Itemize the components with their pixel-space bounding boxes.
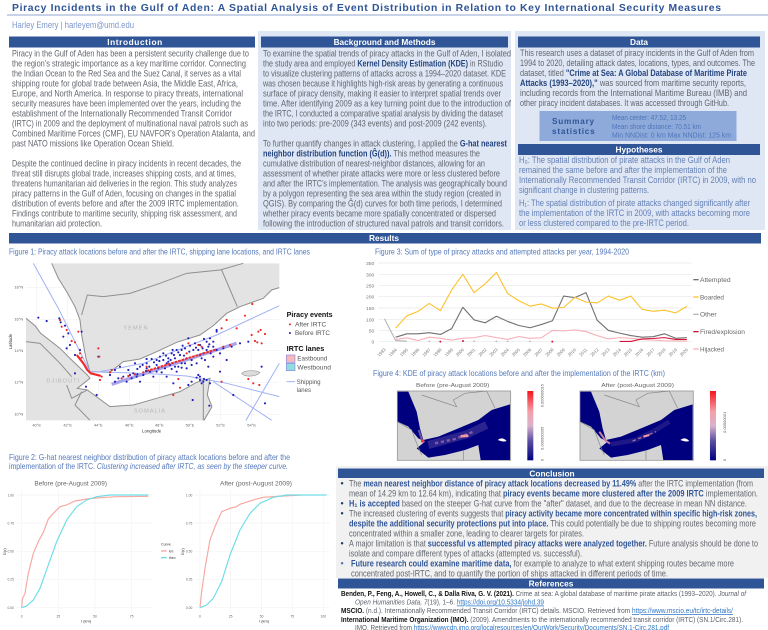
text: methods body: into two periods: pre-2009 (343 events) and post-2009 (242 events). <box>263 118 487 128</box>
text: introduction body: (IRTC) in 2009 and the deployment of multinational naval patrols such as <box>12 118 248 128</box>
chart: figure 2 g-hat curves: 75 <box>130 615 134 619</box>
heading: background and methods: Background and Methods <box>334 37 436 47</box>
chart legend: Attempted <box>700 277 731 284</box>
chart legend: Fired/explosion <box>700 329 745 336</box>
axis labels: 12°N <box>14 380 23 385</box>
axis labels: 0.75 <box>186 521 192 525</box>
text: introduction body: shipping route for global trade between Asia, the Middle East, Africa, <box>12 78 238 88</box>
heading: results <box>9 233 761 244</box>
text: introduction body: distribution of events before and after the 2009 IRTC implementation. <box>12 198 239 208</box>
text: methods body: to visualize clustering patterns of attacks across a 1994–2020 dataset. KDE <box>263 68 506 78</box>
panel: conclusion <box>336 466 768 578</box>
heading: hypotheses <box>518 144 760 155</box>
text: introduction body: threatens humanitarian aid deliveries in the region. This study analyzes <box>12 178 237 188</box>
text: conclusion bullets: • <box>340 498 344 508</box>
text: methods body: To examine the spatial trends of piracy attacks in the Gulf of Aden, I isolated <box>263 48 511 58</box>
KDE before: Before (pre-August 2009) <box>416 383 489 389</box>
x axis labels: 2004 <box>500 347 510 358</box>
chart: figure 3 line chart <box>366 261 745 358</box>
map legend <box>286 310 333 394</box>
text: hypotheses body: or less clustered compared to the pre-IRTC period. <box>519 217 689 228</box>
x axis labels: 2005 <box>511 347 521 358</box>
x axis labels: 2003 <box>488 347 499 358</box>
chart: figure 2 g-hat curves: 50 <box>260 615 264 619</box>
heading: conclusion <box>338 468 764 478</box>
curve legend <box>161 543 176 560</box>
y axis labels: 0 <box>372 340 375 346</box>
map legend: Before IRTC <box>295 330 330 337</box>
text: conclusion bullets: • <box>340 558 344 568</box>
heading: hypotheses: Hypotheses <box>615 144 663 154</box>
axis labels: 48°E <box>155 422 164 427</box>
borders and coastlines <box>26 263 279 420</box>
axis labels: 46°E <box>125 422 134 427</box>
text: methods body: the IRTC, I conducted a comparative spatial analysis by dividing the dataset <box>263 108 503 118</box>
text: introduction body: Combined Maritime Forces (CMF), EU NAVFOR’s Operation Atalanta, and <box>12 128 255 138</box>
text: hypotheses body: significant change in clustering patterns. <box>519 184 649 195</box>
text: methods body: and after the IRTC’s implementation. The analysis was geographically bound <box>263 178 507 188</box>
callout: summary statistics: Mean center: 47.52, 13.25 <box>612 113 686 122</box>
x axis labels: 1996 <box>410 347 421 358</box>
text: conclusion bullets: • <box>340 538 344 548</box>
x axis labels: 2020 <box>679 347 689 358</box>
text: introduction body: the Indian Ocean to the Red Sea and the Suez Canal, it serves as a vital <box>12 68 241 78</box>
country labels: YEMEN <box>123 325 149 331</box>
chart: figure 2 g-hat curves: 0 <box>199 615 201 619</box>
caption: figure 3: Figure 3: Sum of type of piracy attacks and attempted attacks per year, 1994-2020 <box>375 246 629 256</box>
KDE after <box>580 383 727 461</box>
x axis labels: 1999 <box>444 347 454 358</box>
country labels: DJIBOUTI <box>46 379 80 385</box>
text: methods body: whether piracy events became more spatially concentrated or dispersed <box>262 208 496 218</box>
x axis labels: 1997 <box>421 347 432 358</box>
chart: figure 2 g-hat curves: G(r) <box>180 547 185 555</box>
text: data body <box>520 47 755 108</box>
axis labels: 0.25 <box>186 578 192 582</box>
chart: figure 1 map <box>8 263 333 433</box>
text: references: MSCIO. (n.d.). Internationally Recommended Transit Corridor (IRTC) details. MSCIO. Retrieved from https://www.mscio.eu/tc/irtc-details/ <box>341 606 734 615</box>
text: introduction body: threat still disrupts global trade, increases shipping costs, and at times, <box>12 168 236 178</box>
axis labels: 40°E <box>32 422 41 427</box>
map legend: lanes <box>297 387 311 394</box>
country labels <box>46 325 166 415</box>
text: references: Open Humanities Data, 7(19), 1–6. https://doi.org/10.5334/johd.39 <box>355 598 544 606</box>
after IRTC points <box>77 356 100 376</box>
text: methods body <box>262 48 511 228</box>
heading: data: Data <box>630 37 648 47</box>
before panel: Before (pre-August 2009) <box>34 481 107 488</box>
heading: introduction: Introduction <box>107 37 163 47</box>
chart legend: Boarded <box>700 294 724 301</box>
axis labels: 18°N <box>14 285 23 290</box>
text: methods body: neighbor distribution function (Ĝ(d)). This method measures the <box>263 148 480 158</box>
before IRTC points <box>38 318 265 406</box>
x axis labels: 2013 <box>600 347 611 358</box>
KDE after: 0.00000001 <box>722 411 727 433</box>
text: introduction body: Europe, and North America. In response to piracy threats, international <box>12 88 243 98</box>
axis labels: 52°E <box>216 422 225 427</box>
axis labels: 16°N <box>14 317 23 322</box>
curve legend: km <box>169 549 174 553</box>
chart: figure 2 g-hat curves: r (km) <box>259 618 270 623</box>
chart legend: Hijacked <box>700 346 724 353</box>
x axis labels: 2014 <box>612 347 622 358</box>
axis labels: Latitude <box>8 333 13 349</box>
callout: summary statistics <box>540 111 736 141</box>
text: conclusion bullets: concentrated within a smaller zone, leading to clearer targets for pirates. <box>349 528 584 538</box>
text: methods body: was chosen because it highlights high-risk areas by generating a continuous <box>262 78 503 88</box>
axis labels: 0.50 <box>8 550 14 554</box>
heading: data <box>518 36 760 48</box>
text: conclusion bullets: isolate and compare different types of attacks (attempted vs. successful). <box>349 548 582 558</box>
text: introduction body: Findings contribute to maritime security, shipping risk assessment, and <box>12 208 237 218</box>
text: methods body: To further quantify changes in attack clustering, I applied the G-hat nearest <box>263 138 507 148</box>
shipping lanes <box>33 263 279 420</box>
y axis labels: 100 <box>366 317 375 323</box>
KDE before: 0.000000015 <box>539 383 544 407</box>
chart: figure 2 g-hat curves: 0 <box>21 615 23 619</box>
x axis labels: 1998 <box>432 347 443 358</box>
map legend: Eastbound <box>297 355 328 362</box>
chart: figure 2 g-hat curves: r (km) <box>81 618 92 623</box>
axis labels: 0.25 <box>8 578 14 582</box>
country labels: SOMALIA <box>134 409 166 415</box>
text: methods body: cumulative distribution of nearest-neighbor distances, allowing for an <box>263 158 485 168</box>
x axis labels: 2012 <box>589 347 600 358</box>
curve legend: Curve <box>161 543 171 547</box>
text: introduction body: establishment of the Internationally Recommended Transit Corridor <box>12 108 232 118</box>
axis labels: 10°N <box>14 412 23 417</box>
series: other <box>384 319 407 341</box>
x axis labels: 2010 <box>567 347 577 358</box>
after panel: After (post-August 2009) <box>220 481 292 488</box>
KDE before <box>397 383 544 461</box>
y axis labels: 200 <box>366 295 375 301</box>
series: boarded <box>396 272 687 328</box>
x axis labels: 2019 <box>668 347 678 358</box>
text: conclusion bullets: • <box>340 478 344 488</box>
axis labels: 0.00 <box>8 606 14 610</box>
text: introduction body: security measures have been implemented over the years, including the <box>12 98 241 108</box>
x axis labels: 1994 <box>388 347 398 358</box>
axis labels: 1.00 <box>186 493 192 497</box>
map legend: After IRTC <box>295 321 327 328</box>
axis labels: 54°E <box>247 422 256 427</box>
heading: references: References <box>529 578 574 588</box>
text: conclusion bullets: mean of 14.29 km to 12.64 km), indicating that piracy events became more clustered after the 2009 IRTC implementation. <box>349 488 758 498</box>
axis labels: 50°E <box>186 422 195 427</box>
axis labels <box>8 285 256 433</box>
series: hijacked <box>396 330 687 341</box>
x axis labels: 2009 <box>556 347 566 358</box>
x axis labels: 2006 <box>522 347 533 358</box>
caption: figure 1: Figure 1: Piracy attack locations before and after the IRTC, shipping lane locations, and IRTC lanes <box>9 246 310 256</box>
x axis labels: 1995 <box>399 347 409 358</box>
text: conclusion bullets: concentrated post-IRTC, and to quantify the portion of ships attacked in different periods of time. <box>351 568 668 578</box>
text: introduction body: the region’s strategic importance as a key maritime corridor. Connecting <box>12 58 246 68</box>
callout: summary statistics: Mean shore distance: 70.51 km <box>612 122 701 131</box>
map legend: Westbound <box>297 364 331 371</box>
chart: figure 2 g-hat curves: 75 <box>290 615 294 619</box>
chart legend: Other <box>700 312 717 319</box>
y axis labels: 250 <box>366 284 375 290</box>
heading: conclusion: Conclusion <box>529 468 575 478</box>
text: introduction body <box>12 48 255 228</box>
text: references: Benden, P., Feng, A., Howell, C., & Dalla Riva, G. V. (2021). Crime at sea: A global database of maritime pirate attacks (1993–2020). Journal of <box>341 589 747 598</box>
x axis labels: 2001 <box>466 347 477 358</box>
chart: figure 2 g-hat curves: 25 <box>56 615 60 619</box>
text: introduction body: piracy patterns in the Gulf of Aden, focusing on changes in the spatial <box>12 188 236 198</box>
axis labels: 1.00 <box>8 493 14 497</box>
text: methods body: following the introduction of structured naval patrols and transit corridors. <box>263 218 504 228</box>
axis labels: 0.50 <box>186 550 192 554</box>
chart: figure 2 g-hat curves: 50 <box>93 615 97 619</box>
map legend: Shipping <box>297 379 321 386</box>
y axis labels: 150 <box>366 306 375 312</box>
y axis labels: 50 <box>369 328 375 334</box>
KDE after: 0 <box>722 458 727 461</box>
text: conclusion bullets <box>340 478 758 578</box>
axis labels: 0.75 <box>8 521 14 525</box>
chart: figure 2 g-hat curves: G(r) <box>2 547 7 555</box>
text: introduction body: past NATO missions like Operation Ocean Shield. <box>12 138 174 148</box>
text: introduction body: Piracy in the Gulf of Aden has been a persistent security challenge due to <box>12 48 249 58</box>
x axis labels: 2016 <box>634 347 645 358</box>
heading: references <box>338 578 764 588</box>
chart legend <box>693 277 745 353</box>
author line: Harley Emery | harleyem@umd.edu <box>12 20 134 30</box>
heading: introduction <box>9 36 255 48</box>
axis labels: 0.00 <box>186 606 192 610</box>
KDE before: 0.000000005 <box>539 426 544 450</box>
heading: results: Results <box>369 233 399 243</box>
text: methods body: by a polygon representing the sea area within the study region (created in <box>263 188 501 198</box>
axis labels: 44°E <box>94 422 103 427</box>
y axis labels: 300 <box>366 272 375 278</box>
chart: figure 2 g-hat curves <box>2 481 330 623</box>
x axis labels: 2011 <box>578 347 589 357</box>
KDE after: After (post-August 2009) <box>601 383 674 389</box>
panel: background and methods <box>258 31 511 230</box>
caption: figure 2 <box>9 452 290 471</box>
title: Piracy Incidents in the Gulf of Aden: A Spatial Analysis of Event Distribution in Relation to Key International Security Measures <box>12 3 721 14</box>
x axis labels: 2018 <box>656 347 667 358</box>
x axis labels: 2000 <box>455 347 465 358</box>
x axis labels: 2002 <box>477 347 488 358</box>
x axis labels: 2008 <box>544 347 555 358</box>
panel: data and hypotheses <box>515 31 765 230</box>
x axis labels: 2017 <box>645 347 656 358</box>
chart: figure 4 KDE maps <box>397 383 727 461</box>
caption: figure 4: Figure 4: KDE of piracy attack locations before and after the implementation of the IRTC (km) <box>373 368 665 378</box>
text: introduction body: Despite the continued decline in piracy incidents in recent decades, the <box>12 158 241 168</box>
IRTC lanes band <box>112 343 237 384</box>
x axis labels <box>376 347 689 358</box>
text: methods body: surface of piracy density, making it easier to interpret spatial trends over <box>263 88 501 98</box>
axis labels: 42°E <box>63 422 72 427</box>
series: fired/explosion <box>620 338 687 341</box>
axis labels <box>8 493 192 610</box>
land: arabian peninsula <box>52 263 279 372</box>
text: introduction body: humanitarian aid protection. <box>12 218 102 228</box>
x axis labels: 2007 <box>533 347 544 358</box>
chart: figure 2 g-hat curves: 100 <box>321 615 326 619</box>
text: methods body: time. After identifying 2009 as a key turning point due to the introduction of <box>263 98 511 108</box>
y axis labels: 350 <box>366 261 375 267</box>
text: methods body: assessment of whether pirate attacks were more or less clustered before <box>263 168 500 178</box>
axis labels: Longitude <box>142 428 162 433</box>
map legend: IRTC lanes <box>287 344 324 353</box>
before panel <box>22 481 148 608</box>
panel: introduction <box>9 36 255 228</box>
x axis labels: 1993 <box>376 347 387 358</box>
map legend: Piracy events <box>287 310 333 319</box>
chart: figure 2 g-hat curves: 25 <box>229 615 233 619</box>
text: references <box>341 589 747 630</box>
text: methods body: QGIS). By comparing the Ĝ(d) curves for both time periods, I determined <box>263 198 502 208</box>
KDE before: 0 <box>539 458 544 461</box>
text: conclusion bullets: • <box>340 508 344 518</box>
y axis labels <box>366 261 375 346</box>
after panel <box>200 481 327 608</box>
caption: figure 2: Figure 2: G-hat nearest neighbor distribution of piracy attack locations before and after the <box>9 452 290 462</box>
data series <box>384 272 687 341</box>
text: methods body: the study area and employed Kernel Density Estimation (KDE) in RStudio <box>263 58 503 68</box>
callout: summary statistics: Min NNDist: 0 km Max NNDist: 125 km <box>612 130 731 140</box>
land: horn of africa <box>26 318 212 420</box>
x axis labels: 2015 <box>623 347 633 358</box>
callout: summary statistics: statistics <box>552 127 596 136</box>
series: attempted <box>396 293 687 338</box>
heading: background and methods <box>261 36 508 48</box>
text: hypotheses body <box>519 154 756 228</box>
callout: summary statistics: Summary <box>552 117 595 126</box>
caption: figure 2: implementation of the IRTC. Clustering increased after IRTC, as seen by the steeper curve. <box>9 461 288 471</box>
land: socotra <box>242 371 260 376</box>
axis labels: 14°N <box>14 348 23 353</box>
curve legend: theo <box>169 556 176 560</box>
